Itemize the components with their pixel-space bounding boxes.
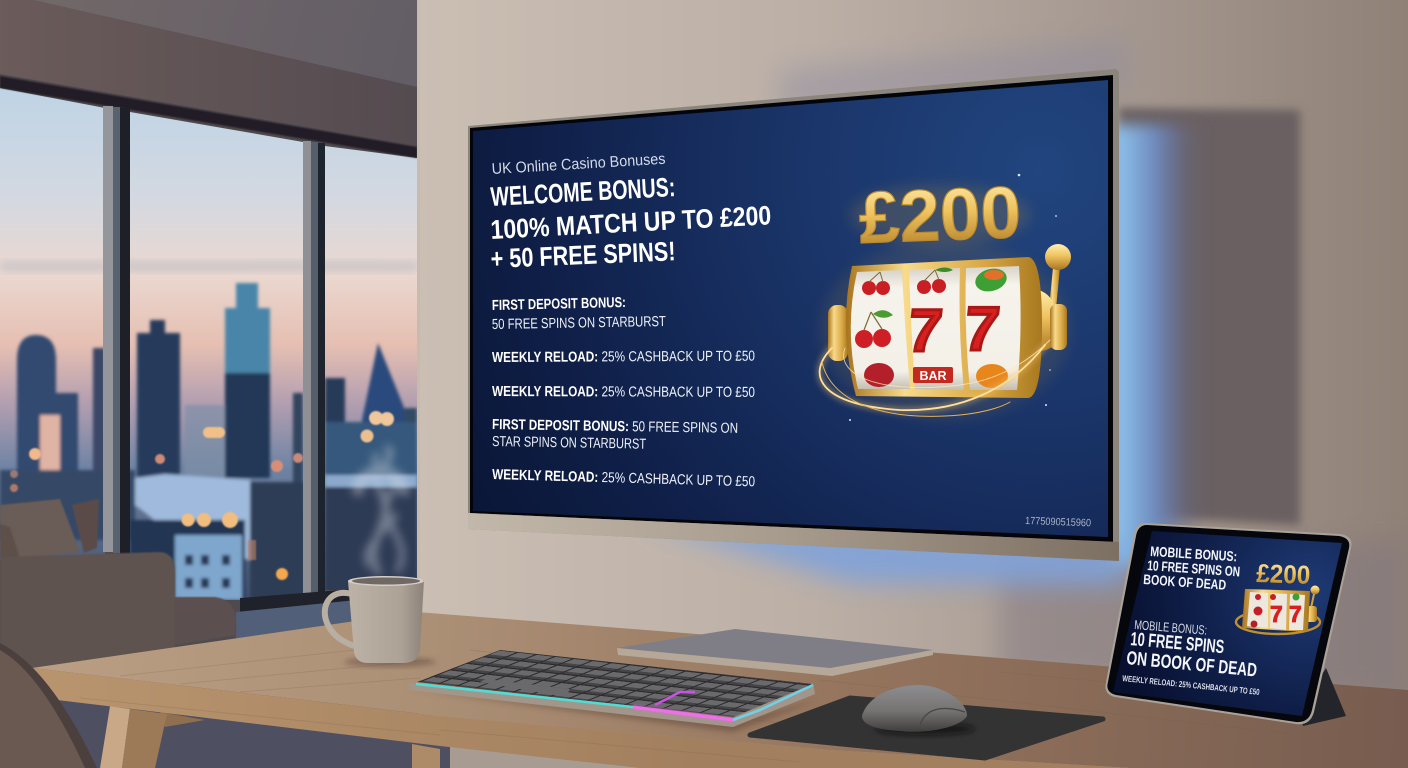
row three symbols	[864, 363, 1008, 388]
top backlight	[776, 48, 1119, 98]
tablet stand	[1300, 668, 1346, 726]
left drum cap	[828, 305, 848, 361]
chair at bottom left	[0, 643, 97, 768]
row two symbols	[855, 295, 1002, 364]
mug handle	[325, 593, 354, 646]
mouse pad	[750, 698, 1103, 758]
tablet text	[1122, 543, 1260, 697]
monitor bezel	[470, 75, 1113, 542]
space bar	[480, 679, 570, 697]
headline line 3: + 50 FREE SPINS!	[490, 236, 676, 274]
window mullion left	[103, 106, 130, 554]
serial number: 1775090515960	[1025, 515, 1091, 529]
floor by the window	[236, 594, 417, 640]
tablet line: MOBILE BONUS:	[1150, 543, 1238, 564]
headline line 2: 100% MATCH UP TO £200	[490, 200, 772, 245]
sofa seat	[175, 597, 236, 645]
desk	[32, 612, 1408, 768]
monitor chin	[468, 513, 1119, 561]
red seven: 7	[905, 297, 945, 364]
coffee mug with steam	[325, 448, 436, 667]
lever	[1045, 244, 1071, 308]
sofa in the room	[0, 499, 236, 710]
reels	[851, 266, 1021, 390]
list item: first deposit 2: FIRST DEPOSIT BONUS: 50 FREE SPINS ON	[492, 417, 738, 437]
cast shadow	[1119, 108, 1300, 525]
monitor stand base plate	[617, 629, 933, 676]
right backlight	[1108, 125, 1206, 565]
underglow right	[733, 685, 813, 720]
tablet bezel	[1107, 525, 1349, 722]
red seven: 7	[961, 295, 1002, 364]
list item: starburst: 50 FREE SPINS ON STARBURST	[492, 314, 666, 333]
tablet line: 10 FREE SPINS ON	[1147, 557, 1241, 579]
monitor frame	[468, 69, 1119, 561]
underglow halo	[633, 707, 733, 720]
tablet line: ON BOOK OF DEAD	[1126, 648, 1258, 682]
list item: weekly reload 1: WEEKLY RELOAD: 25% CASHBACK UP TO £50	[492, 349, 755, 366]
BAR tile: BAR	[919, 369, 947, 383]
screen bonus list	[492, 295, 755, 490]
tablet line: 10 FREE SPINS	[1130, 629, 1225, 658]
mug body	[348, 580, 424, 663]
tablet seven: 7	[1289, 601, 1302, 627]
wood grain	[80, 645, 1400, 762]
sparkles	[849, 174, 1057, 421]
window with blurred city skyline	[0, 76, 418, 640]
left room ceiling and header beam	[0, 0, 418, 768]
desk legs	[100, 706, 440, 768]
steam	[358, 448, 404, 572]
desk leg right	[412, 744, 440, 768]
floor under the desk	[40, 695, 450, 768]
list item: weekly reload 3: WEEKLY RELOAD: 25% CASHBACK UP TO £50	[492, 467, 755, 490]
desk top	[32, 612, 1408, 768]
list item: first deposit: FIRST DEPOSIT BONUS:	[492, 295, 626, 314]
sofa cushion front	[0, 524, 20, 560]
cityscape panes	[0, 80, 418, 620]
tablet line: BOOK OF DEAD	[1143, 571, 1227, 593]
monitor	[460, 60, 1130, 561]
sofa cushion back	[72, 499, 99, 553]
eyebrow line: UK Online Casino Bonuses	[491, 151, 666, 178]
prize amount: £200	[858, 172, 1022, 259]
monitor shadow and blue backlight on wall	[640, 40, 1408, 700]
tablet prize: £200	[1256, 558, 1311, 590]
underglow pink	[633, 707, 733, 720]
golden swirl	[820, 340, 1050, 416]
lower wall shade	[996, 555, 1385, 684]
window mullion right	[303, 141, 325, 599]
tablet seven: 7	[1270, 601, 1283, 627]
tablet body	[1105, 523, 1352, 724]
underglow pink branch	[655, 692, 695, 705]
window top frame	[0, 76, 417, 158]
mug shadow	[344, 657, 436, 667]
keyboard shadow	[409, 690, 818, 732]
tablet line: WEEKLY RELOAD: 25% CASHBACK UP TO £50	[1122, 673, 1260, 697]
tablet line: MOBILE BONUS:	[1134, 617, 1208, 638]
right drum cap	[1030, 288, 1067, 352]
mouse	[862, 685, 975, 735]
keyboard	[409, 650, 818, 732]
drum body	[846, 257, 1042, 398]
desk front edge	[32, 668, 1130, 768]
headline line 1: WELCOME BONUS:	[490, 172, 676, 212]
sofa back	[0, 552, 175, 710]
BAR tile	[913, 367, 953, 383]
screen heading text	[490, 151, 772, 274]
row one symbols	[862, 265, 1009, 295]
key field	[417, 650, 813, 717]
skyline buildings	[0, 283, 417, 600]
list item: star spins: STAR SPINS ON STARBURST	[492, 434, 646, 453]
slot machine illustration	[820, 240, 1071, 420]
brace	[160, 712, 205, 727]
bottom backlight	[670, 539, 1128, 600]
back wall	[417, 0, 1408, 700]
tablet screen	[1113, 531, 1342, 716]
list item: weekly reload 2: WEEKLY RELOAD: 25% CASHBACK UP TO £50	[492, 384, 755, 401]
keyboard case	[409, 683, 815, 727]
sofa cushion	[0, 499, 80, 560]
tablet slot machine	[1236, 586, 1320, 634]
bokeh city lights	[10, 411, 394, 580]
tablet	[1100, 520, 1360, 730]
desk leg left	[100, 706, 167, 768]
window bottom sill	[240, 584, 417, 614]
underglow cyan	[416, 684, 633, 707]
